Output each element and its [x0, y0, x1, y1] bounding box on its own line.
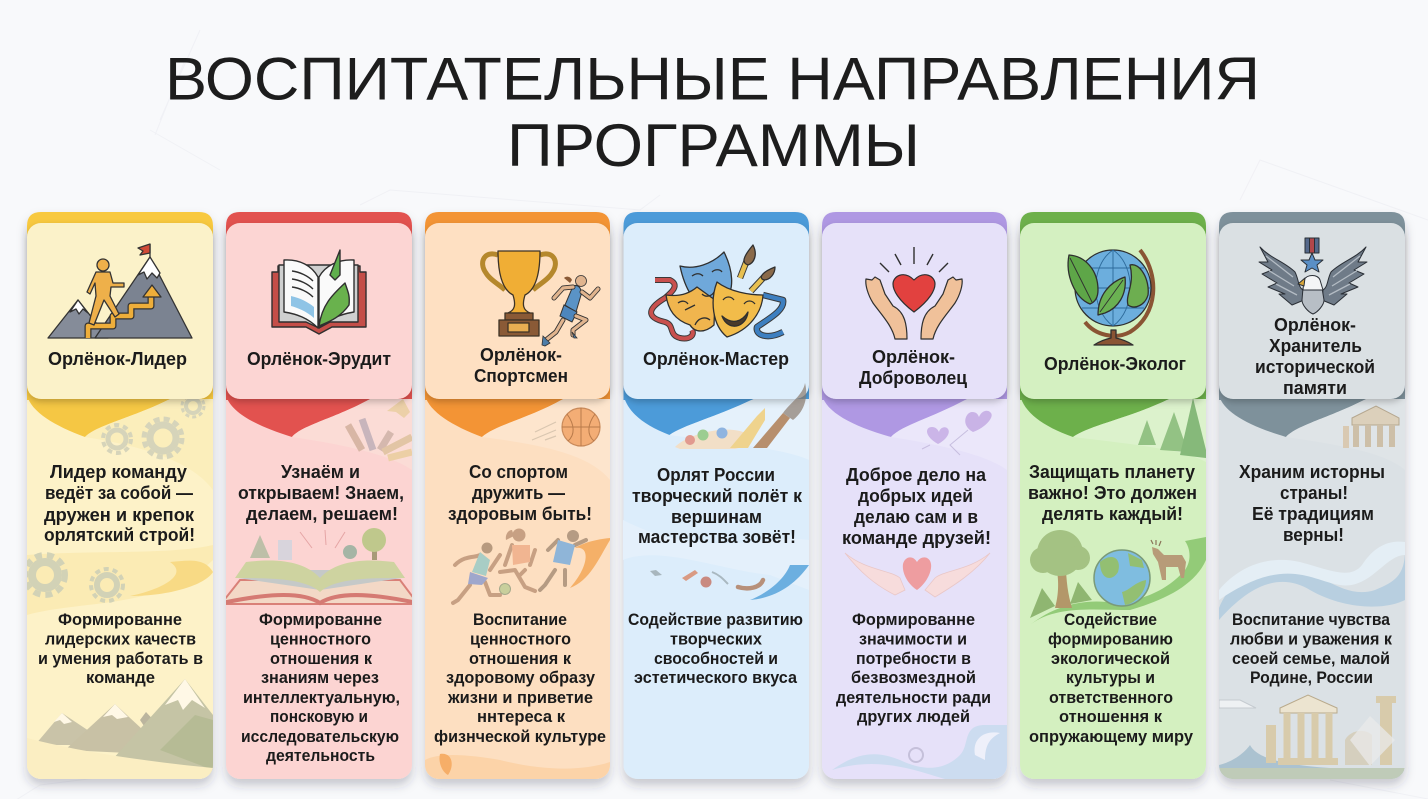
description	[1029, 610, 1194, 746]
description: потребности в	[856, 649, 971, 668]
decoration: hearts, hands, waves	[832, 411, 1007, 779]
description: Содействие	[1064, 610, 1157, 629]
description: ответственного	[1049, 688, 1173, 707]
description	[434, 610, 606, 746]
title: ВОСПИТАТЕЛЬНЫЕ НАПРАВЛЕНИЯ	[165, 46, 1260, 112]
description: отношения к	[270, 649, 372, 668]
heading: Доброволец	[859, 367, 968, 388]
description: знаниям через	[261, 668, 379, 687]
slogan: ведёт за собой —	[45, 482, 193, 503]
heading	[474, 344, 568, 386]
description: любви и уважения к	[1230, 630, 1392, 648]
slogan	[842, 464, 991, 548]
card background and ribbon	[425, 212, 610, 779]
slogan: команде друзей!	[842, 527, 991, 548]
description: интеллектуальную,	[243, 688, 400, 707]
description: ценностного	[270, 630, 371, 648]
heading: Орлёнок-Мастер	[643, 348, 789, 369]
icon: eagle with star medal	[1259, 238, 1367, 314]
heading: Орлёнок-Эрудит	[247, 348, 391, 369]
description: формированию	[1048, 630, 1173, 648]
description: опружающему миру	[1029, 727, 1194, 746]
card background and ribbon	[1219, 212, 1405, 779]
decoration: brush tip overlapping panel	[783, 383, 806, 420]
description: исследовательскую	[241, 727, 399, 746]
description: деятельность	[266, 746, 375, 765]
decoration: basketball, runners	[425, 408, 610, 780]
description: других людей	[857, 707, 970, 726]
slogan	[238, 461, 404, 524]
slogan: дружить —	[472, 482, 565, 503]
description: эстетического вкуса	[634, 668, 798, 687]
card background and ribbon	[1020, 212, 1206, 779]
card background and ribbon	[27, 212, 213, 779]
slogan: орлятский строй!	[44, 524, 195, 545]
icon: heart in hands	[866, 247, 962, 339]
panel: Орлёнок-Хранитель исторической памяти	[1219, 212, 1405, 779]
slogan: Узнаём и	[281, 461, 360, 482]
description: жизни и приветие	[447, 688, 593, 707]
panel: Орлёнок-Доброволец	[822, 212, 1007, 779]
description: и умения работать в	[38, 649, 203, 668]
decoration: gears, mountains	[25, 395, 213, 779]
header panel	[624, 223, 809, 399]
slogan	[448, 461, 592, 524]
header panel	[822, 223, 1007, 399]
icon: globe with leaves	[1068, 250, 1153, 345]
heading: исторической	[1255, 356, 1375, 377]
description: Воспитание	[473, 610, 567, 629]
header panel	[226, 223, 412, 399]
description	[628, 610, 803, 687]
description: сеоей семье, малой	[1232, 649, 1390, 668]
title: ПРОГРАММЫ	[507, 112, 920, 179]
description: физнческой культуре	[434, 727, 606, 746]
panel: Орлёнок-Мастер	[623, 212, 809, 779]
title	[165, 46, 1260, 179]
header panel	[1219, 223, 1405, 399]
heading: Орлёнок-Эколог	[1044, 353, 1186, 374]
description: понсковую и	[270, 707, 368, 726]
description: творческих	[670, 630, 763, 648]
description	[1230, 610, 1392, 687]
slogan: здоровым быть!	[448, 503, 592, 524]
heading: Спортсмен	[474, 365, 568, 386]
icon: trophy and runner	[483, 251, 598, 346]
slogan	[1239, 461, 1385, 545]
slogan: Лидер команду	[50, 461, 188, 482]
heading: Хранитель	[1269, 335, 1362, 356]
icon: open book	[272, 250, 366, 334]
description: лидерских качеств	[45, 630, 196, 648]
slogan: делаю сам и в	[854, 506, 978, 527]
description: Формированне	[852, 610, 975, 629]
slogan: добрых идей	[858, 485, 973, 506]
slogan: открываем! Знаем,	[238, 482, 404, 503]
slogan	[632, 464, 803, 547]
panel: Орлёнок-Лидер	[25, 212, 213, 779]
slogan: делять каждый!	[1042, 503, 1183, 524]
slogan: вершинам	[671, 506, 762, 527]
slogan: Со спортом	[469, 461, 568, 482]
heading: Орлёнок-	[1274, 314, 1356, 335]
description: здоровому образу	[446, 668, 596, 687]
heading	[1255, 314, 1375, 398]
description: Формированне	[58, 610, 182, 629]
slogan	[44, 461, 195, 545]
decoration: pines, tree, globe, deer	[1030, 398, 1206, 625]
description: команде	[86, 668, 155, 687]
icon: climber on mountain	[48, 244, 192, 338]
description	[241, 610, 400, 765]
slogan: страны!	[1280, 482, 1348, 503]
header panel	[425, 223, 610, 399]
slogan: Её традициям	[1252, 503, 1374, 524]
description: безвозмездной	[851, 668, 976, 687]
description: отношения к	[469, 649, 571, 668]
description: культуры и	[1066, 668, 1155, 687]
description: ннтереса к	[477, 707, 565, 726]
card background and ribbon	[226, 212, 412, 779]
decoration: palette, pencil, brush	[623, 408, 809, 600]
panel: Орлёнок-Спортсмен	[425, 212, 610, 780]
slogan: творческий полёт к	[632, 485, 803, 506]
heading: Орлёнок-	[480, 344, 562, 365]
card background and ribbon	[624, 212, 809, 779]
heading	[859, 346, 968, 388]
heading: Орлёнок-	[872, 346, 955, 367]
decoration: books, open book	[221, 399, 418, 604]
slogan: дружен и крепок	[44, 504, 195, 525]
heading: памяти	[1283, 377, 1347, 398]
slogan: важно! Это должен	[1028, 482, 1197, 503]
slogan: верны!	[1283, 524, 1344, 545]
description: Формированне	[259, 610, 382, 629]
description: Содействие развитию	[628, 610, 803, 629]
panel: Орлёнок-Эколог	[1020, 212, 1206, 779]
description: значимости и	[859, 630, 967, 648]
description: свособностей и	[654, 649, 778, 668]
slogan: Защищать планету	[1029, 461, 1196, 482]
description: деятельности ради	[836, 688, 991, 707]
icon: theatre masks and brushes	[651, 245, 783, 338]
description: Воспитание чувства	[1232, 610, 1390, 629]
slogan: Храним исторны	[1239, 461, 1385, 482]
slogan	[1028, 461, 1197, 524]
description: Родине, России	[1250, 668, 1373, 687]
panel: Орлёнок-Эрудит	[221, 212, 418, 779]
slogan: Доброе дело на	[846, 464, 987, 485]
slogan: мастерства зовёт!	[638, 526, 796, 547]
slogan: Орлят России	[657, 464, 775, 485]
card background and ribbon	[822, 212, 1007, 779]
description	[836, 610, 991, 726]
description: отношення к	[1059, 707, 1162, 726]
decoration: temples, wave	[1219, 406, 1405, 779]
slogan: делаем, решаем!	[246, 503, 398, 524]
heading: Орлёнок-Лидер	[48, 348, 187, 369]
header panel	[1020, 223, 1206, 399]
description: экологической	[1051, 649, 1170, 668]
description: ценностного	[470, 630, 571, 648]
header panel	[27, 223, 213, 399]
description	[38, 610, 203, 687]
